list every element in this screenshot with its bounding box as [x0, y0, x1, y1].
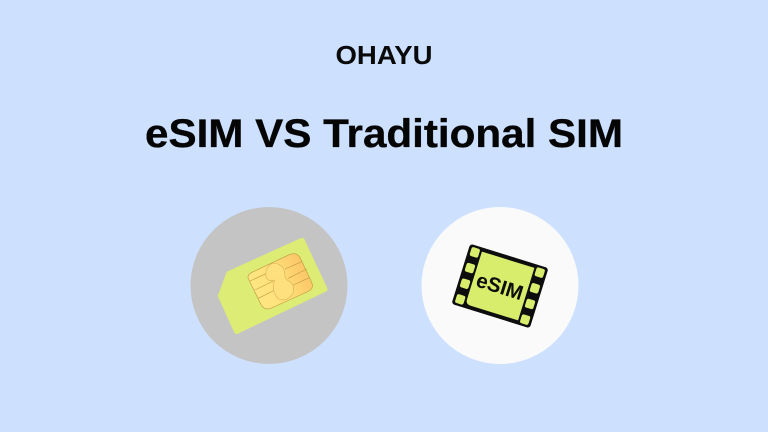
SIM card body — [218, 238, 328, 334]
film-strip frame — [451, 244, 549, 328]
brand logo: OHAYU: OHAYU — [336, 40, 432, 70]
SIM chip — [248, 254, 312, 309]
eSIM label: eSIM — [473, 269, 526, 305]
right perforations — [520, 267, 545, 325]
chip centre blob — [266, 263, 293, 300]
grey circle backdrop — [190, 207, 348, 364]
icon: eSIM card — [422, 207, 578, 364]
chip contact lines — [250, 262, 309, 298]
central chip panel — [466, 252, 534, 320]
left perforations — [455, 247, 480, 305]
title: eSIM VS Traditional SIM — [145, 112, 623, 156]
icon: traditional SIM card — [190, 207, 348, 364]
white circle backdrop — [422, 207, 578, 364]
